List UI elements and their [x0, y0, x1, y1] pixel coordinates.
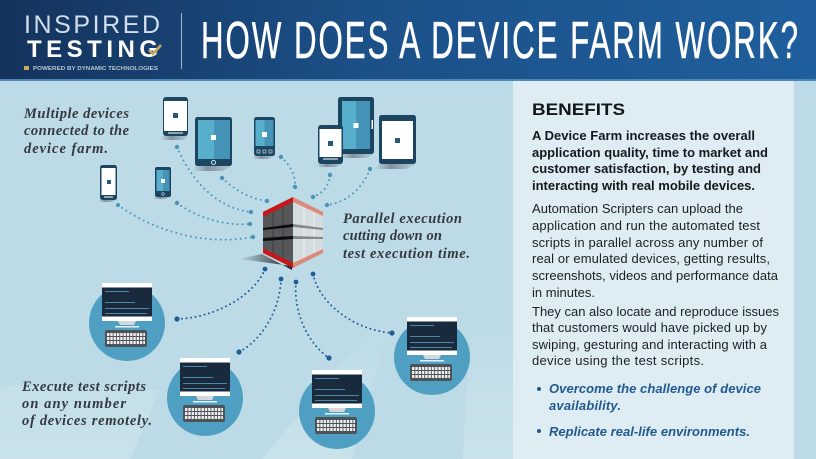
icon: phone white front — [316, 125, 343, 167]
connection lines: farm to computers — [174, 267, 395, 361]
body paragraph 1: Automation Scripters can upload the — [532, 201, 743, 216]
logo: POWERED BY DYNAMIC TECHNOLOGIES — [33, 66, 158, 72]
bullet list: Replicate real-life environments. — [549, 424, 750, 439]
caption: multiple devices: Multiple devices — [23, 106, 129, 122]
body paragraph 2: They can also locate and reproduce issues — [532, 304, 780, 319]
caption: multiple devices: device farm. — [24, 141, 108, 157]
body paragraph 1: real or emulated devices, getting results, — [532, 251, 770, 266]
computer 1 — [89, 283, 165, 361]
icon: phone white small — [98, 165, 117, 202]
caption: multiple devices: connected to the — [24, 123, 130, 139]
icon: tablet tall blue — [338, 97, 374, 158]
connection lines: devices to farm — [116, 145, 372, 240]
computer 2 — [167, 358, 243, 436]
bullet list: Overcome the challenge of device — [549, 381, 761, 396]
icon: phone blue with buttons — [252, 117, 275, 159]
logo: INSPIRED — [24, 11, 160, 39]
body paragraph 2: swiping, gesturing and interacting with a — [532, 337, 768, 352]
intro text: interacting with real mobile devices. — [532, 178, 755, 193]
computer 4 — [394, 317, 470, 395]
icon: phone blue small — [153, 167, 171, 199]
caption: execute test scripts: of devices remotely. — [22, 413, 152, 429]
icon: tablet white — [374, 115, 416, 169]
body paragraph 1: scripts in parallel across any number of — [532, 235, 763, 250]
intro text: application quality, time to market and — [532, 145, 768, 160]
caption: execute test scripts — [21, 379, 152, 429]
device farm cube — [239, 197, 323, 270]
body paragraph 1: in minutes. — [532, 285, 595, 300]
body paragraph 2: that customers would have picked up by — [532, 320, 768, 335]
caption: parallel execution: Parallel execution — [343, 211, 462, 227]
bullet list — [537, 381, 761, 439]
body paragraph 2: device using the test scripts. — [532, 353, 704, 368]
intro text: customer satisfaction, by testing and — [532, 161, 761, 176]
body paragraph 1: screenshots, videos and performance data — [532, 268, 779, 283]
computer 3 — [299, 370, 375, 449]
caption: parallel execution: test execution time. — [343, 246, 470, 262]
body paragraph 1: application and run the automated test — [532, 218, 760, 233]
intro text — [532, 128, 768, 193]
icon: phone white — [160, 97, 188, 140]
heading: BENEFITS — [532, 100, 625, 119]
logo — [24, 11, 161, 72]
panel: benefits — [513, 81, 794, 459]
intro text: A Device Farm increases the overall — [532, 128, 755, 143]
caption: execute test scripts: on any number — [22, 396, 126, 412]
icon: tablet blue — [192, 117, 232, 171]
caption: execute test scripts: Execute test scripts — [21, 379, 146, 395]
title: HOW DOES A DEVICE FARM WORK? — [201, 12, 798, 70]
logo: TESTING — [27, 36, 158, 63]
header banner — [0, 0, 816, 81]
caption: parallel execution: cutting down on — [343, 228, 442, 244]
caption: multiple devices — [23, 106, 130, 157]
body paragraph 1 — [532, 201, 779, 300]
bullet list: availability. — [549, 398, 621, 413]
body paragraph 2 — [532, 304, 780, 368]
caption: parallel execution — [343, 211, 470, 262]
